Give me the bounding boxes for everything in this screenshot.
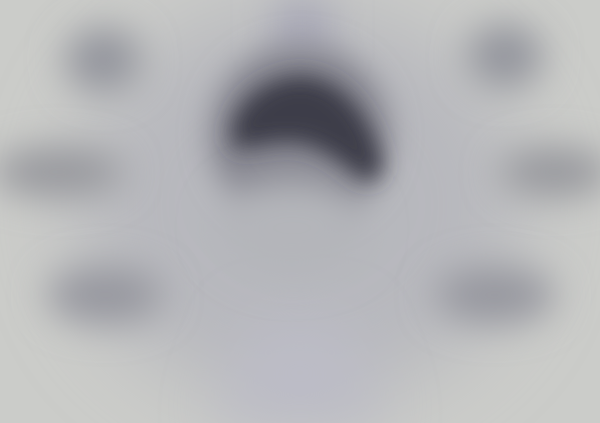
left middle item blob — [0, 148, 124, 196]
right top item blob — [467, 24, 543, 88]
head lower fade — [217, 178, 367, 278]
head silhouette halo — [210, 45, 390, 225]
left top item blob — [65, 28, 141, 92]
top stem — [275, 0, 330, 60]
central panel glow — [75, 5, 525, 405]
right bottom item blob — [435, 267, 555, 323]
bottom column — [215, 320, 385, 423]
right middle item blob — [499, 148, 600, 196]
left bottom item blob — [47, 267, 163, 323]
dark cap shape — [232, 76, 381, 180]
